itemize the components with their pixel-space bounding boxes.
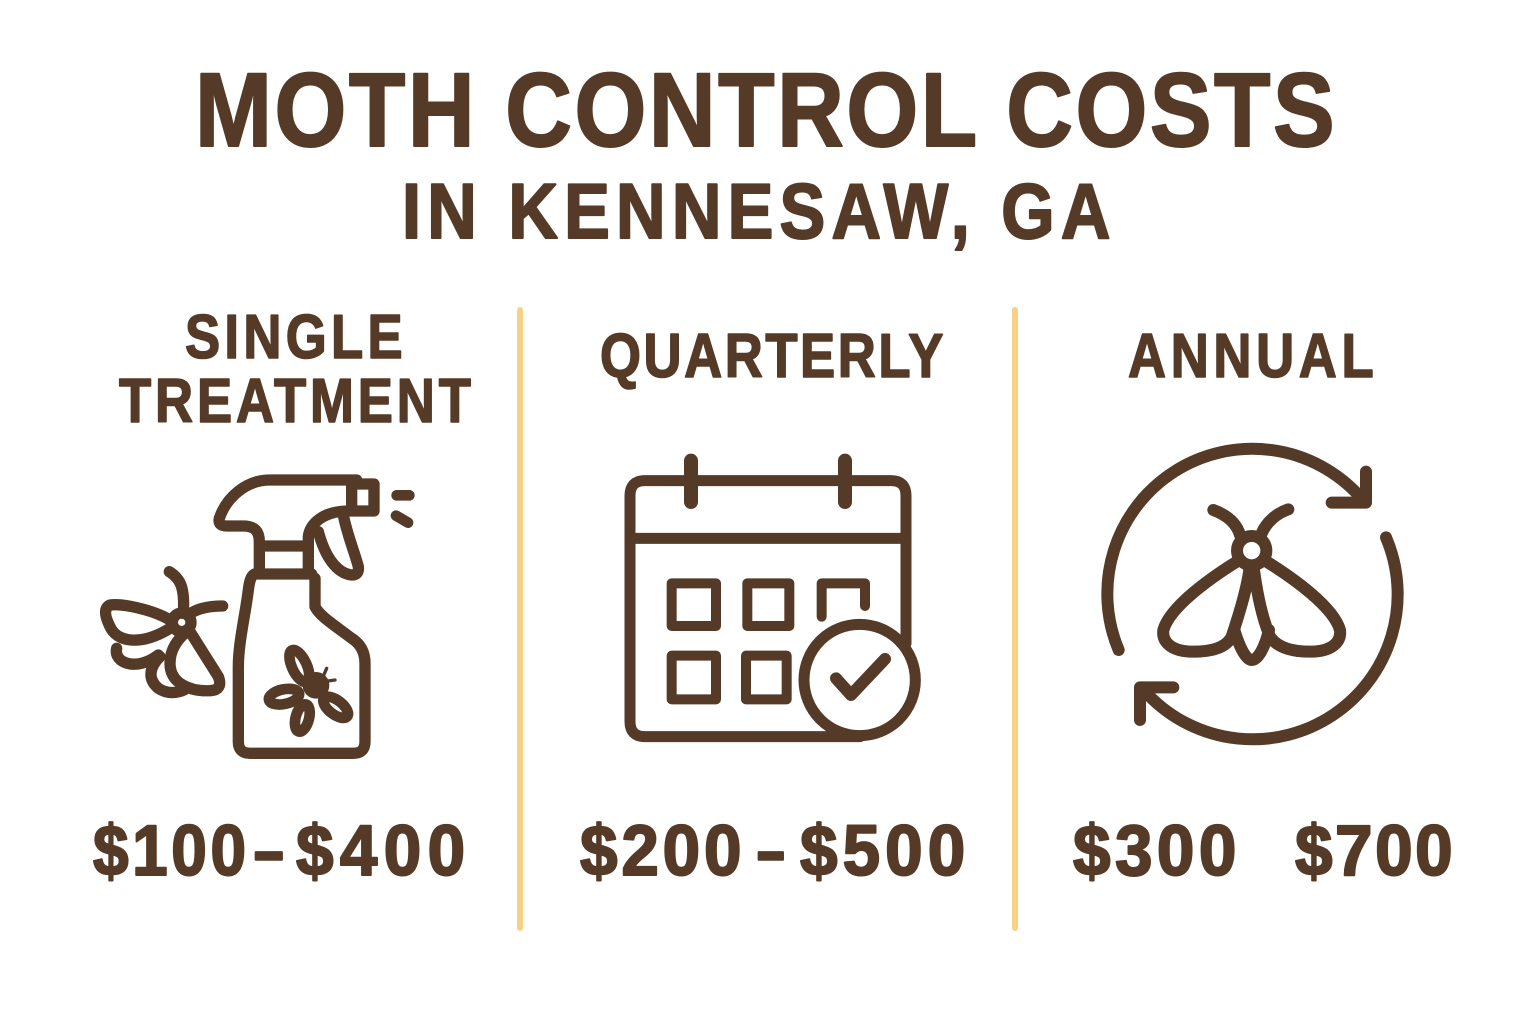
price: annual high: $700 (1295, 810, 1453, 890)
heading: single treatment (119, 303, 471, 436)
heading: single treatment: SINGLE (185, 303, 403, 372)
calendar rings (691, 461, 845, 502)
check badge (804, 624, 915, 736)
calendar day squares (672, 583, 865, 699)
price: quarterly (580, 810, 965, 890)
panel: single treatment (93, 303, 471, 891)
moth inside bottle (267, 647, 352, 733)
circular arrows (1107, 449, 1366, 650)
icon: calendar with check mark (630, 461, 915, 737)
heading: single treatment: TREATMENT (119, 367, 471, 436)
price: quarterly: $500 (800, 810, 965, 890)
price: quarterly: – (757, 811, 785, 890)
price: quarterly: $200 (580, 810, 742, 890)
heading: annual: ANNUAL (1128, 322, 1374, 391)
divider right (1012, 307, 1018, 931)
trigger (318, 515, 358, 575)
price: single treatment: – (254, 812, 284, 891)
subtitle: IN KENNESAW, GA (402, 167, 1110, 255)
calendar frame (630, 481, 906, 737)
moth beside bottle (106, 572, 223, 693)
spray droplets (396, 495, 409, 523)
moth (1163, 509, 1340, 660)
panel: quarterly (580, 322, 965, 890)
price: single treatment: $400 (296, 810, 465, 890)
bottle body (238, 574, 365, 753)
icon: moth in circular arrows (1107, 449, 1398, 739)
price: annual low: $300 (1073, 810, 1236, 890)
title: MOTH CONTROL COSTS (195, 50, 1335, 168)
spray head (219, 480, 374, 574)
panel: annual (1073, 322, 1453, 890)
divider left (517, 307, 523, 931)
price: single treatment: $100 (93, 812, 246, 891)
icon: spray bottle with moths (106, 480, 409, 753)
heading: quarterly: QUARTERLY (600, 322, 943, 391)
price: single treatment (93, 810, 465, 891)
